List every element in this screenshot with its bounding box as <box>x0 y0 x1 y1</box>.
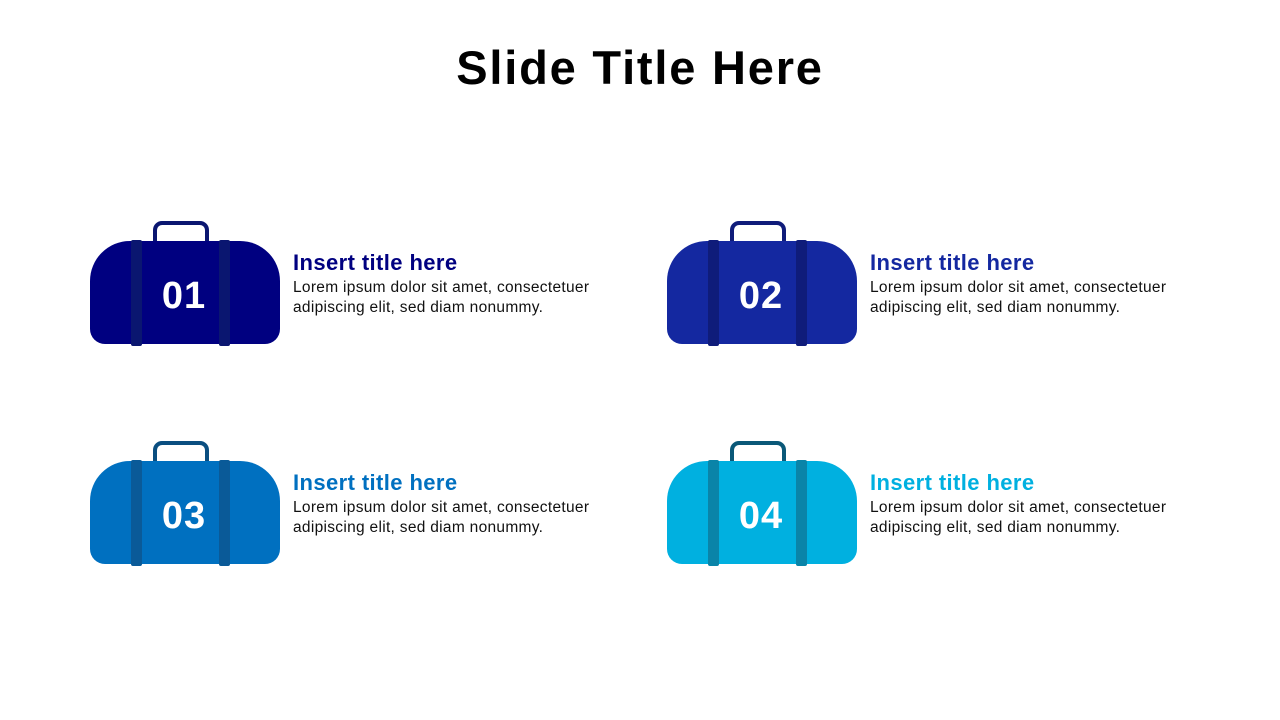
icon: bag 01 <box>90 221 280 346</box>
icon: bag 03 <box>90 441 280 566</box>
icon: bag 03: 03 <box>162 495 206 537</box>
item 02 <box>667 221 1166 346</box>
item 04 <box>667 441 1166 566</box>
icon: bag 04 <box>667 441 857 566</box>
text 04 <box>870 470 1166 536</box>
icon: bag 01: 01 <box>162 275 206 317</box>
item 01 <box>90 221 589 346</box>
icon: bag 04: 04 <box>739 495 783 537</box>
icon: bag 02: 02 <box>739 275 783 317</box>
text 02: Insert title here <box>870 250 1035 275</box>
text 01: Lorem ipsum dolor sit amet, consectetuer adipiscing elit, sed diam nonummy. <box>293 279 589 316</box>
text 01 <box>293 250 589 316</box>
text 01: Insert title here <box>293 250 458 275</box>
title: Slide Title Here <box>456 41 824 94</box>
text 04: Lorem ipsum dolor sit amet, consectetuer adipiscing elit, sed diam nonummy. <box>870 499 1166 536</box>
text 03: Insert title here <box>293 470 458 495</box>
text 02: Lorem ipsum dolor sit amet, consectetuer adipiscing elit, sed diam nonummy. <box>870 279 1166 316</box>
text 03 <box>293 470 589 536</box>
item 03 <box>90 441 589 566</box>
icon: bag 02 <box>667 221 857 346</box>
text 03: Lorem ipsum dolor sit amet, consectetuer adipiscing elit, sed diam nonummy. <box>293 499 589 536</box>
text 02 <box>870 250 1166 316</box>
text 04: Insert title here <box>870 470 1035 495</box>
